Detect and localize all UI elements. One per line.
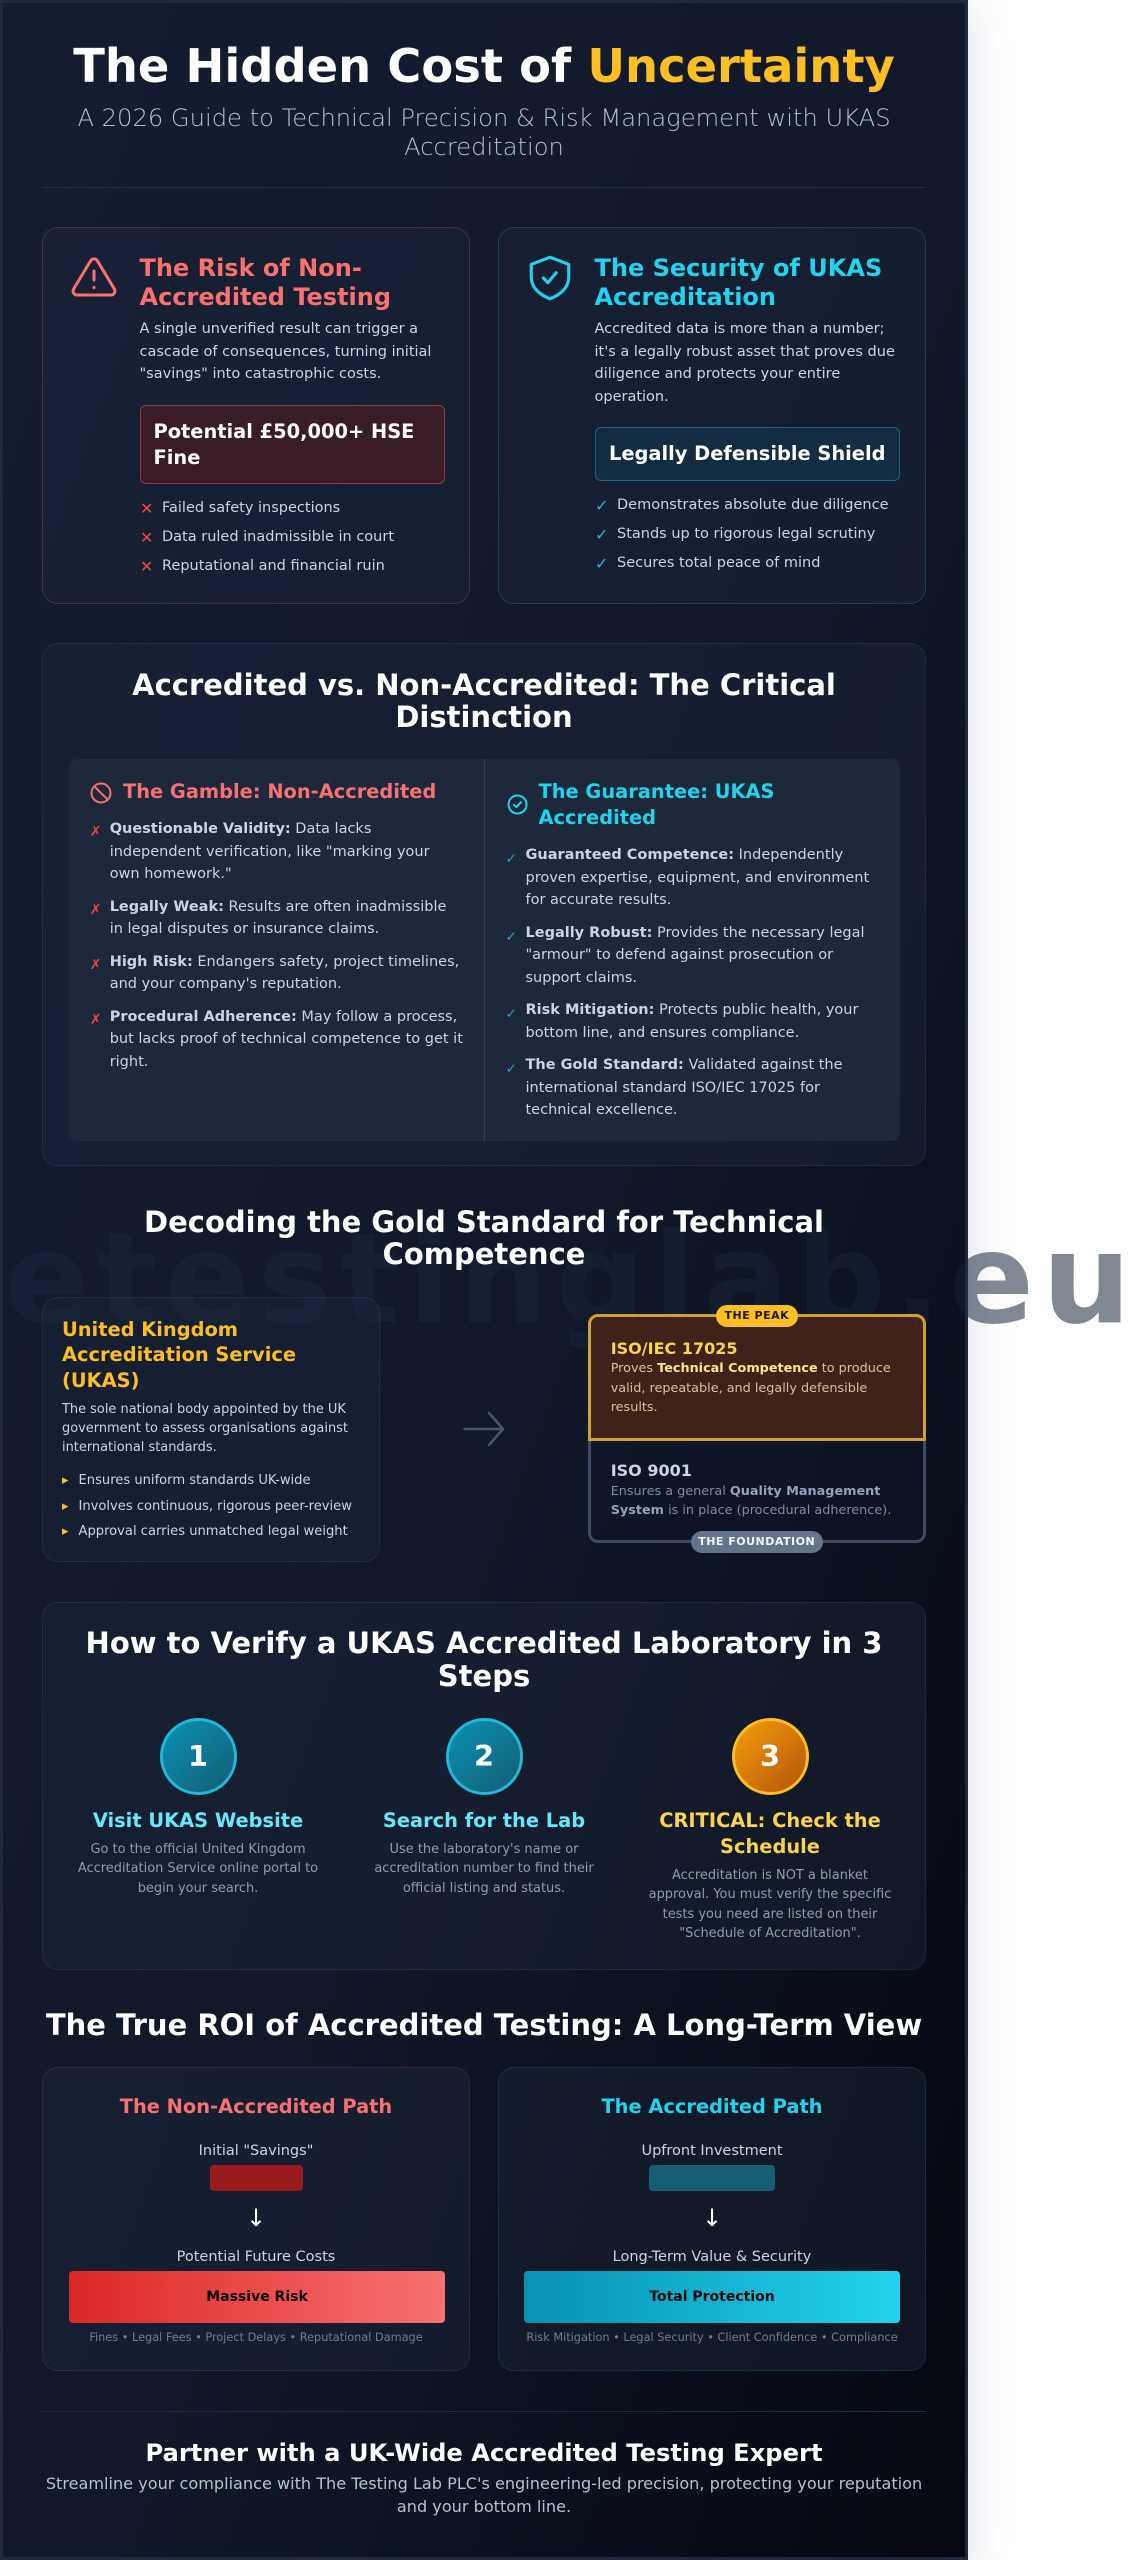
list: security benefits: Stands up to rigorous legal scrutiny: [617, 526, 875, 542]
list: guarantee: [506, 847, 869, 1118]
panel: accredited path: [498, 2067, 926, 2371]
step 2: Search for the Lab: [383, 1809, 585, 1832]
list: security benefits: Secures total peace of mind: [617, 555, 820, 571]
step 2: [374, 1718, 594, 1896]
list: gamble: in legal disputes or insurance claims.: [110, 921, 379, 937]
big bar: [69, 2271, 445, 2323]
heading: UKAS: United Kingdom Accreditation Service (UKAS): [62, 1318, 296, 1392]
panel: verify steps: [42, 1602, 926, 1970]
heading: verify: How to Verify a UKAS Accredited Laboratory in 3 Steps: [86, 1626, 882, 1692]
text: ✓: [506, 1006, 517, 1022]
list: UKAS: Involves continuous, rigorous peer-review: [78, 1499, 352, 1514]
text: security: Accredited data is more than a number; it's a legally robust asset that proves due diligence and protects your entire operation.: [594, 321, 895, 405]
heading: ISO 9001: ISO 9001: [611, 1461, 692, 1480]
icon: prohibited: [90, 782, 112, 804]
step 1: 1: [188, 1739, 208, 1773]
list: gamble: Questionable Validity: Data lacks: [110, 821, 371, 837]
footer heading: Partner with a UK-Wide Accredited Testing Expert: [145, 2438, 823, 2466]
panel: ISO 17025: [588, 1314, 926, 1441]
step 3: CRITICAL: Check the Schedule: [659, 1809, 881, 1858]
text: ✗: [90, 902, 101, 918]
step 3: 3: [760, 1739, 780, 1773]
badge: peak: THE PEAK: [724, 1309, 789, 1322]
list: UKAS: Ensures uniform standards UK-wide: [78, 1473, 311, 1488]
list: guarantee: bottom line, and ensures compliance.: [526, 1025, 799, 1041]
list: gamble: independent verification, like "marking your: [110, 844, 430, 860]
list: guarantee: The Gold Standard: Validated against the: [526, 1057, 843, 1073]
panel: comparison: [42, 643, 926, 1166]
text: ✗: [90, 1012, 101, 1028]
list: guarantee: international standard ISO/IEC 17025 for: [526, 1080, 820, 1096]
text: ✗: [90, 824, 101, 840]
list: risk consequences: ✕: [140, 499, 153, 518]
panel: security: [498, 227, 926, 604]
callout: shield: Legally Defensible Shield: [609, 442, 886, 465]
step 1: Go to the official United Kingdom Accreditation Service online portal to begin your search.: [78, 1842, 318, 1896]
list: gamble: own homework.": [110, 866, 232, 882]
cost list: Fines • Legal Fees • Project Delays • Reputational Damage: [89, 2330, 423, 2344]
list: security benefits: ✓: [595, 525, 608, 544]
panel: UKAS: [42, 1297, 380, 1562]
list: gamble: High Risk: Endangers safety, project timelines,: [110, 954, 459, 970]
list: gamble: Procedural Adherence: May follow a process,: [110, 1009, 457, 1025]
heading: ROI: The True ROI of Accredited Testing: A Long-Term View: [46, 2008, 922, 2042]
heading: ISO 17025: ISO/IEC 17025: [611, 1338, 737, 1358]
text: risk: A single unverified result can trigger a cascade of consequences, turning initial "savings" into catastrophic costs.: [140, 321, 431, 382]
path label: investment: Upfront Investment: [641, 2142, 783, 2158]
heading: decoding: Decoding the Gold Standard for Technical Competence: [144, 1204, 824, 1271]
path label: value: Long-Term Value & Security: [613, 2249, 811, 2265]
step 3: [649, 1718, 891, 1941]
title: The Hidden Cost of Uncertainty: [73, 39, 895, 93]
value list: Risk Mitigation • Legal Security • Client Confidence • Compliance: [526, 2330, 898, 2344]
panel: non-accredited path: [42, 2067, 470, 2371]
text: UKAS: The sole national body appointed by the UK government to assess organisations against international standards.: [62, 1402, 348, 1455]
step 1: [78, 1718, 318, 1896]
list: risk consequences: Reputational and financial ruin: [162, 558, 385, 574]
list: gamble: and your company's reputation.: [110, 976, 342, 992]
arrow down: ↓: [702, 2204, 722, 2232]
list: gamble: right.: [110, 1054, 148, 1070]
heading: risk: The Risk of Non-Accredited Testing: [140, 254, 391, 310]
step 2: Use the laboratory's name or accreditation number to find their official listing and status.: [374, 1842, 594, 1896]
list: security benefits: Demonstrates absolute due diligence: [617, 497, 888, 513]
list: security benefits: ✓: [595, 554, 608, 573]
footer text: Streamline your compliance with The Testing Lab PLC's engineering-led precision, protecting your reputation: [46, 2474, 922, 2493]
icon: shield: [530, 256, 570, 300]
list: security benefits: ✓: [595, 496, 608, 515]
path label: costs: Potential Future Costs: [177, 2249, 335, 2265]
callout: fine: [140, 405, 445, 484]
path label: savings: Initial "Savings": [199, 2142, 313, 2158]
small bar: [649, 2165, 775, 2191]
list: guarantee: "armour" to defend against prosecution or: [526, 947, 833, 963]
heading: comparison: Accredited vs. Non-Accredited: The Critical Distinction: [132, 668, 836, 734]
badge: foundation: THE FOUNDATION: [698, 1535, 815, 1548]
badge: foundation: [691, 1531, 823, 1553]
text: ✗: [90, 957, 101, 973]
badge: peak: [716, 1305, 798, 1327]
list: risk consequences: ✕: [140, 528, 153, 547]
table: comparison: [69, 759, 900, 1141]
big bar: Total Protection: [649, 2289, 775, 2305]
icon: warning triangle: [72, 257, 116, 296]
list: UKAS: [62, 1473, 352, 1539]
list: security benefits: [595, 496, 888, 573]
list: risk consequences: Data ruled inadmissible in court: [162, 529, 394, 545]
list: guarantee: support claims.: [526, 970, 637, 986]
panel: ISO 9001: [588, 1441, 926, 1543]
big bar: [524, 2271, 900, 2323]
list: UKAS: Approval carries unmatched legal weight: [78, 1524, 348, 1539]
text: ✓: [506, 1061, 517, 1077]
text: ISO 9001: Ensures a general Quality Management System is in place (procedural adherence).: [611, 1484, 891, 1518]
list: risk consequences: Failed safety inspections: [162, 500, 340, 516]
list: guarantee: Guaranteed Competence: Independently: [526, 847, 843, 863]
list: gamble: [90, 821, 463, 1070]
panel: risk: [42, 227, 470, 604]
text: ✓: [506, 929, 517, 945]
callout: shield: [594, 427, 900, 480]
text: ISO 17025: Proves Technical Competence to produce valid, repeatable, and legally defensible results.: [611, 1361, 891, 1415]
step 3: Accreditation is NOT a blanket approval. You must verify the specific tests you need are listed on their "Schedule of Accreditation".: [649, 1868, 891, 1941]
path title: The Non-Accredited Path: [120, 2094, 392, 2118]
list: UKAS: ▸: [62, 1473, 69, 1488]
list: risk consequences: [140, 499, 394, 576]
list: guarantee: Risk Mitigation: Protects public health, your: [526, 1002, 858, 1018]
subtitle: A 2026 Guide to Technical Precision & Risk Management with UKAS Accreditation: [77, 104, 891, 160]
path title: The Accredited Path: [601, 2094, 823, 2118]
heading: guarantee: The Guarantee: UKAS Accredited: [538, 780, 775, 828]
list: UKAS: ▸: [62, 1524, 69, 1539]
step 2: 2: [474, 1739, 494, 1773]
arrow down: ↓: [246, 2204, 266, 2232]
list: gamble: but lacks proof of technical competence to get it: [110, 1031, 463, 1047]
heading: security: The Security of UKAS Accreditation: [594, 254, 882, 310]
icon: check circle: [508, 794, 528, 814]
step 1: Visit UKAS Website: [93, 1809, 303, 1832]
list: guarantee: Legally Robust: Provides the necessary legal: [526, 925, 865, 941]
big bar: Massive Risk: [206, 2289, 308, 2305]
list: guarantee: technical excellence.: [526, 1102, 678, 1118]
small bar: [210, 2165, 303, 2191]
text: ✓: [506, 851, 517, 867]
heading: gamble: The Gamble: Non-Accredited: [123, 780, 436, 803]
list: UKAS: ▸: [62, 1499, 69, 1514]
list: guarantee: for accurate results.: [526, 892, 671, 908]
list: guarantee: proven expertise, equipment, and environment: [526, 870, 869, 886]
list: gamble: Legally Weak: Results are often inadmissible: [110, 899, 446, 915]
list: risk consequences: ✕: [140, 557, 153, 576]
callout: fine: Potential £50,000+ HSE Fine: [154, 420, 414, 469]
arrow: [463, 1412, 504, 1446]
footer text: [46, 2474, 922, 2516]
footer text: and your bottom line.: [397, 2497, 571, 2516]
